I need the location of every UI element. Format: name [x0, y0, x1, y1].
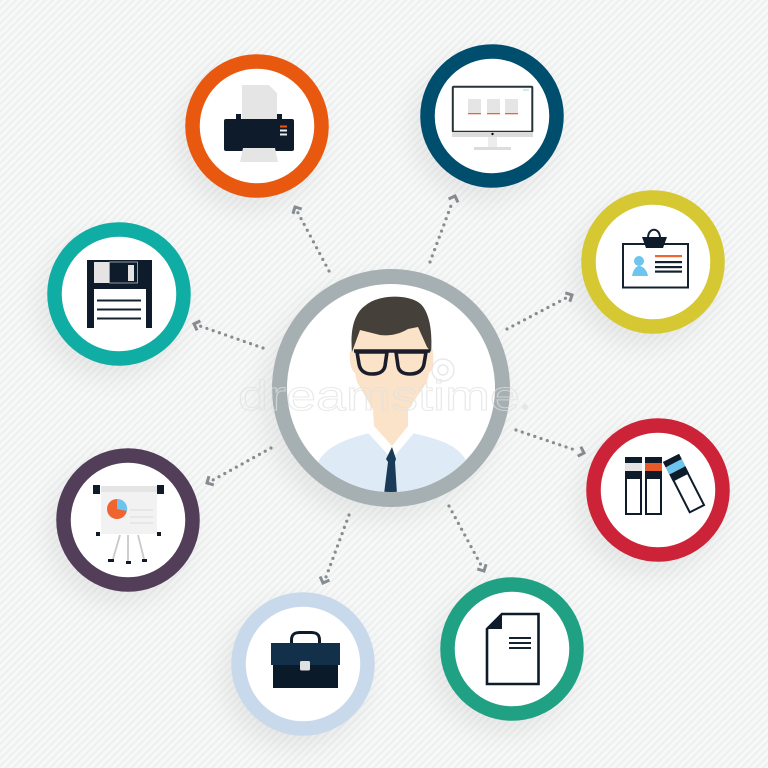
watermark text [238, 359, 528, 419]
shirt [318, 434, 466, 492]
badge: printer [177, 62, 322, 210]
necktie [384, 447, 397, 494]
arrow: to presentation [205, 448, 271, 487]
badge: presentation [48, 456, 192, 604]
collar [368, 426, 414, 456]
icon: floppy disk [87, 260, 152, 328]
arrow: to id card [507, 291, 574, 329]
badge: briefcase [223, 600, 368, 748]
central person badge [262, 276, 502, 519]
icon: printer [224, 85, 294, 162]
icon: briefcase [271, 632, 340, 688]
glasses [354, 351, 430, 374]
watermark text: dreamstime [238, 372, 520, 419]
badge: id card [573, 198, 718, 346]
badge: monitor [412, 52, 556, 200]
icon: id card [623, 230, 688, 288]
icon: binders [625, 454, 705, 514]
arrow: to briefcase [318, 515, 349, 585]
hair [352, 297, 431, 352]
arrow: to books [516, 430, 586, 458]
arrow: to printer [291, 205, 329, 271]
badge: floppy disk [39, 230, 184, 378]
badge: books [578, 426, 722, 574]
arrow: to floppy [192, 319, 263, 348]
icon: monitor [452, 87, 533, 150]
badge: document [432, 584, 576, 733]
arrow: to monitor [430, 194, 460, 262]
icon: presentation board [93, 485, 164, 564]
face and neck [350, 325, 433, 448]
arrow: to document [449, 506, 488, 573]
icon: document [486, 613, 538, 684]
